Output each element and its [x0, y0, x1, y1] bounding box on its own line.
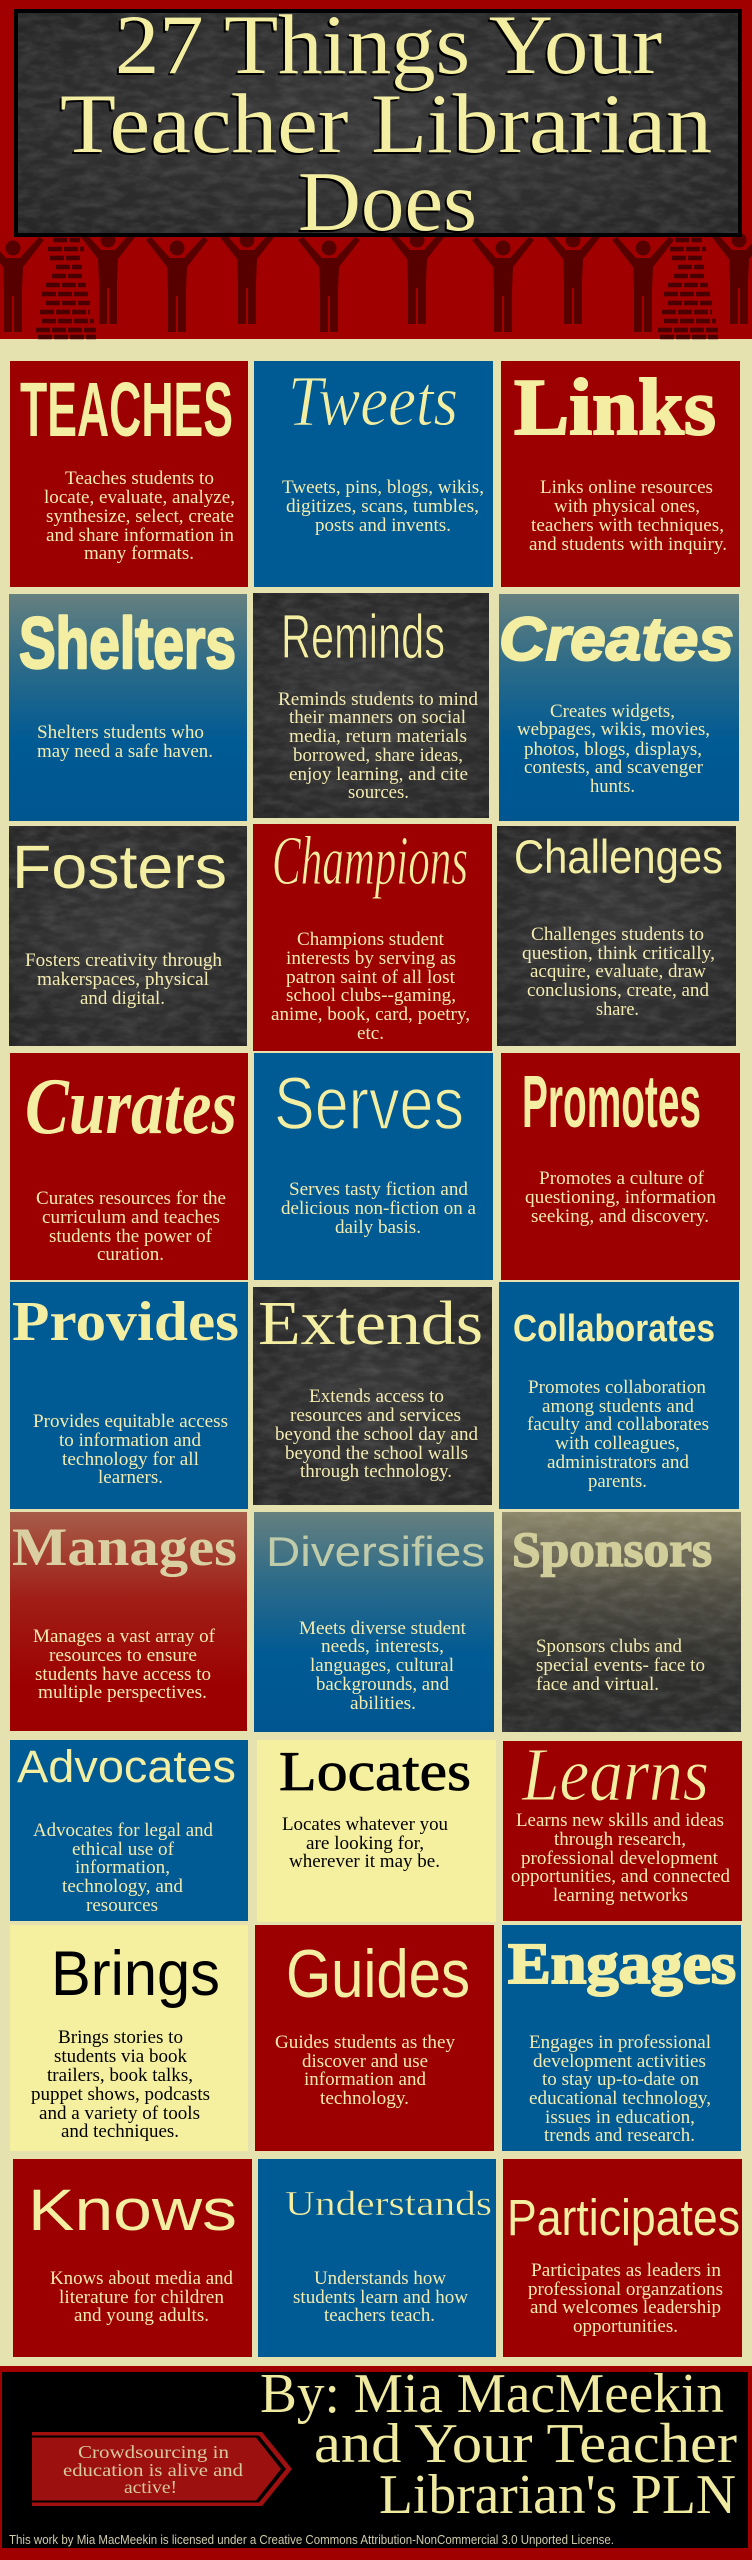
description: Locates whatever you	[282, 1815, 448, 1835]
panel: Creates	[499, 594, 739, 821]
description: Fosters creativity through	[25, 951, 222, 971]
description: to stay up-to-date on	[542, 2070, 699, 2090]
panel: Diversifies	[254, 1512, 494, 1732]
description: multiple perspectives.	[38, 1683, 207, 1703]
description	[282, 1815, 448, 1872]
description	[527, 1378, 709, 1492]
description: puppet shows, podcasts	[31, 2085, 210, 2105]
description: learning networks	[553, 1886, 688, 1906]
description: Reminds students to mind	[278, 690, 479, 710]
heading: Advocates	[17, 1741, 236, 1792]
description	[536, 1637, 705, 1695]
description: information,	[75, 1858, 170, 1878]
description: hunts.	[590, 777, 635, 797]
description: opportunities.	[573, 2317, 678, 2337]
description: makerspaces, physical	[37, 970, 209, 990]
panel: Sponsors	[502, 1512, 741, 1732]
panel: Locates	[257, 1740, 496, 1922]
heading: Engages	[508, 1931, 736, 1996]
description: through research,	[554, 1830, 686, 1850]
heading: Sponsors	[512, 1521, 712, 1577]
panel: Participates	[503, 2159, 742, 2357]
description: opportunities, and connected	[511, 1867, 731, 1887]
description: with colleagues,	[555, 1434, 680, 1454]
description: seeking, and discovery.	[531, 1207, 709, 1227]
description: among students and	[542, 1397, 695, 1417]
description	[511, 1811, 731, 1906]
panel: Challenges	[497, 826, 736, 1046]
description: technology.	[320, 2089, 409, 2109]
arrow callout: active!	[124, 2477, 177, 2497]
description: Tweets, pins, blogs, wikis,	[282, 478, 484, 498]
description	[31, 2028, 210, 2142]
description: Shelters students who	[37, 723, 204, 743]
description: technology for all	[62, 1450, 199, 1470]
heading: Links	[514, 364, 716, 452]
panel: Fosters	[9, 826, 247, 1046]
description: are looking for,	[306, 1834, 424, 1854]
description: anime, book, card, poetry,	[271, 1005, 470, 1025]
description	[517, 702, 710, 797]
description: Brings stories to	[58, 2028, 183, 2048]
panel: Engages	[502, 1925, 741, 2151]
description: trailers, book talks,	[47, 2066, 193, 2086]
panel: Extends	[253, 1287, 492, 1505]
description: locate, evaluate, analyze,	[44, 488, 235, 508]
panel: Collaborates	[499, 1282, 739, 1509]
description	[522, 925, 715, 1020]
panel: Curates	[10, 1053, 248, 1280]
credit heading: Librarian's PLN	[379, 2464, 736, 2526]
description: questioning, information	[525, 1188, 716, 1208]
heading: Challenges	[514, 830, 723, 883]
panel: Advocates	[10, 1740, 248, 1921]
title: Does	[298, 155, 477, 249]
header band	[0, 0, 752, 339]
description: information and	[304, 2070, 427, 2090]
description: daily basis.	[335, 1218, 421, 1238]
description: digitizes, scans, tumbles,	[286, 497, 479, 517]
heading: Extends	[258, 1290, 483, 1358]
arrow callout: Crowdsourcing in	[78, 2442, 229, 2462]
panel: Promotes	[501, 1053, 740, 1280]
description: administrators and	[547, 1453, 690, 1473]
description: Promotes a culture of	[539, 1169, 705, 1189]
description: issues in education,	[545, 2108, 695, 2128]
heading: Locates	[279, 1741, 471, 1803]
panel: Champions	[253, 823, 492, 1051]
heading: Learns	[521, 1733, 709, 1817]
description	[278, 690, 479, 803]
description: Meets diverse student	[299, 1619, 467, 1639]
panel: Serves	[254, 1053, 493, 1280]
description: etc.	[357, 1024, 384, 1044]
description: beyond the school walls	[285, 1444, 468, 1464]
description	[529, 478, 727, 555]
description: photos, blogs, displays,	[524, 740, 702, 760]
description: and welcomes leadership	[530, 2298, 721, 2318]
heading: Brings	[51, 1939, 220, 2009]
description: Advocates for legal and	[33, 1821, 214, 1841]
heading: Shelters	[19, 604, 236, 684]
description: through technology.	[300, 1462, 452, 1482]
description: trends and research.	[544, 2126, 695, 2146]
description: Promotes collaboration	[528, 1378, 706, 1398]
description: learners.	[98, 1468, 163, 1488]
panel: Brings	[10, 1925, 248, 2151]
description: students have access to	[35, 1665, 211, 1685]
heading: Knows	[28, 2178, 237, 2243]
footer	[0, 2363, 752, 2560]
heading: Creates	[499, 605, 734, 673]
description: curriculum and teaches	[42, 1208, 220, 1228]
description: face and virtual.	[536, 1675, 659, 1695]
description: and students with inquiry.	[529, 535, 727, 555]
description: share.	[596, 1000, 639, 1020]
heading: Understands	[285, 2184, 492, 2223]
description: synthesize, select, create	[46, 507, 234, 527]
description: Creates widgets,	[550, 702, 675, 722]
heading: TEACHES	[20, 367, 233, 453]
description: wherever it may be.	[289, 1852, 440, 1872]
description: development activities	[533, 2052, 706, 2072]
description: posts and invents.	[315, 516, 451, 536]
panel: Manages	[10, 1512, 247, 1731]
description: faculty and collaborates	[527, 1415, 709, 1435]
description: Guides students as they	[275, 2033, 456, 2053]
description: delicious non-fiction on a	[281, 1199, 476, 1219]
description: and share information in	[46, 526, 234, 546]
heading: Fosters	[12, 833, 227, 901]
panel: Understands	[258, 2159, 496, 2357]
description: backgrounds, and	[316, 1675, 450, 1695]
credit heading	[260, 2363, 737, 2526]
figures holding up the board	[0, 229, 752, 332]
license line: This work by Mia MacMeekin is licensed under a Creative Commons Attribution-NonCommercial 3.0 Unported License.	[9, 2533, 614, 2547]
title: Teacher Librarian	[60, 77, 712, 171]
title	[60, 0, 712, 249]
description	[25, 951, 222, 1009]
description: Champions student	[297, 930, 445, 950]
description: Understands how	[314, 2269, 447, 2289]
description	[293, 2269, 469, 2326]
panel: Knows	[13, 2159, 252, 2357]
description: ethical use of	[72, 1840, 175, 1860]
description: resources	[86, 1896, 158, 1916]
arrow callout: education is alive and	[63, 2460, 243, 2480]
description: professional development	[521, 1849, 719, 1869]
description	[44, 469, 235, 564]
description: students via book	[54, 2047, 188, 2067]
description: technology, and	[62, 1877, 184, 1897]
description: their manners on social	[289, 708, 466, 728]
description: enjoy learning, and cite	[289, 765, 468, 785]
panel: Learns	[503, 1733, 742, 1921]
panel: Links	[501, 361, 740, 587]
description: many formats.	[84, 544, 194, 564]
description: Links online resources	[540, 478, 713, 498]
description	[33, 1627, 216, 1703]
description: curation.	[97, 1245, 164, 1265]
description: abilities.	[350, 1694, 416, 1714]
heading: Curates	[25, 1063, 237, 1151]
description: and young adults.	[74, 2306, 209, 2326]
description: webpages, wikis, movies,	[517, 720, 710, 740]
description: patron saint of all lost	[286, 968, 456, 988]
panel: Teaches	[10, 361, 248, 587]
description: acquire, evaluate, draw	[530, 962, 707, 982]
description: Teaches students to	[65, 469, 214, 489]
description: Provides equitable access	[33, 1412, 228, 1432]
arrow callout	[32, 2432, 292, 2506]
heading: Serves	[274, 1062, 464, 1145]
description: Challenges students to	[531, 925, 704, 945]
description: students the power of	[49, 1227, 213, 1247]
description: Engages in professional	[529, 2033, 711, 2053]
description: parents.	[588, 1472, 647, 1492]
description: educational technology,	[529, 2089, 711, 2109]
description	[36, 1189, 226, 1265]
description	[271, 930, 470, 1044]
description: Knows about media and	[50, 2269, 234, 2289]
heading: Guides	[286, 1936, 470, 2012]
description: professional organzations	[528, 2280, 723, 2300]
heading: Diversifies	[266, 1528, 485, 1575]
description	[525, 1169, 716, 1227]
description: needs, interests,	[321, 1637, 444, 1657]
title: 27 Things Your	[115, 0, 662, 92]
description	[299, 1619, 467, 1714]
description: and digital.	[80, 989, 165, 1009]
heading: Reminds	[281, 603, 445, 672]
description	[33, 1821, 214, 1916]
description: Learns new skills and ideas	[516, 1811, 724, 1831]
description: literature for children	[59, 2288, 224, 2308]
description: and techniques.	[61, 2122, 179, 2142]
description: Extends access to	[309, 1387, 444, 1407]
description	[275, 1387, 479, 1482]
description	[275, 2033, 456, 2109]
description: media, return materials	[289, 727, 467, 747]
description: conclusions, create, and	[527, 981, 710, 1001]
description: special events- face to	[536, 1656, 705, 1676]
panel: Shelters	[9, 594, 247, 821]
credit heading: and Your Teacher	[314, 2413, 737, 2475]
description: discover and use	[302, 2052, 428, 2072]
heading: Collaborates	[513, 1308, 715, 1350]
description: resources to ensure	[49, 1646, 197, 1666]
panel: Reminds	[253, 593, 489, 818]
description: teachers with techniques,	[531, 516, 724, 536]
description	[33, 1412, 228, 1488]
description: with physical ones,	[554, 497, 700, 517]
description: Participates as leaders in	[531, 2261, 721, 2281]
description: resources and services	[290, 1406, 461, 1426]
description: Manages a vast array of	[33, 1627, 216, 1647]
chalkboard	[14, 9, 742, 237]
panel: Guides	[255, 1925, 494, 2151]
heading: Manages	[12, 1517, 237, 1577]
description: languages, cultural	[310, 1656, 454, 1676]
panel: Provides	[10, 1282, 248, 1509]
heading: Provides	[12, 1291, 239, 1353]
description: borrowed, share ideas,	[293, 746, 463, 766]
description: contests, and scavenger	[524, 758, 703, 778]
description	[281, 1180, 476, 1238]
description	[50, 2269, 234, 2326]
credit heading: By: Mia MacMeekin	[260, 2363, 724, 2425]
description: Sponsors clubs and	[536, 1637, 683, 1657]
description: question, think critically,	[522, 944, 715, 964]
description: may need a safe haven.	[37, 742, 213, 762]
description: and a variety of tools	[39, 2104, 200, 2124]
description: students learn and how	[293, 2288, 469, 2308]
description: Serves tasty fiction and	[289, 1180, 469, 1200]
heading: Champions	[272, 823, 468, 900]
book stacks	[36, 240, 718, 337]
description: school clubs--gaming,	[286, 986, 456, 1006]
description: teachers teach.	[324, 2306, 435, 2326]
description: interests by serving as	[286, 949, 456, 969]
description: Curates resources for the	[36, 1189, 226, 1209]
description: to information and	[59, 1431, 202, 1451]
description	[528, 2261, 723, 2337]
description: beyond the school day and	[275, 1425, 479, 1445]
heading: Tweets	[288, 361, 458, 441]
panel: Tweets	[254, 361, 493, 587]
description	[37, 723, 213, 762]
description: sources.	[348, 783, 409, 803]
description	[529, 2033, 711, 2146]
description	[282, 478, 484, 536]
